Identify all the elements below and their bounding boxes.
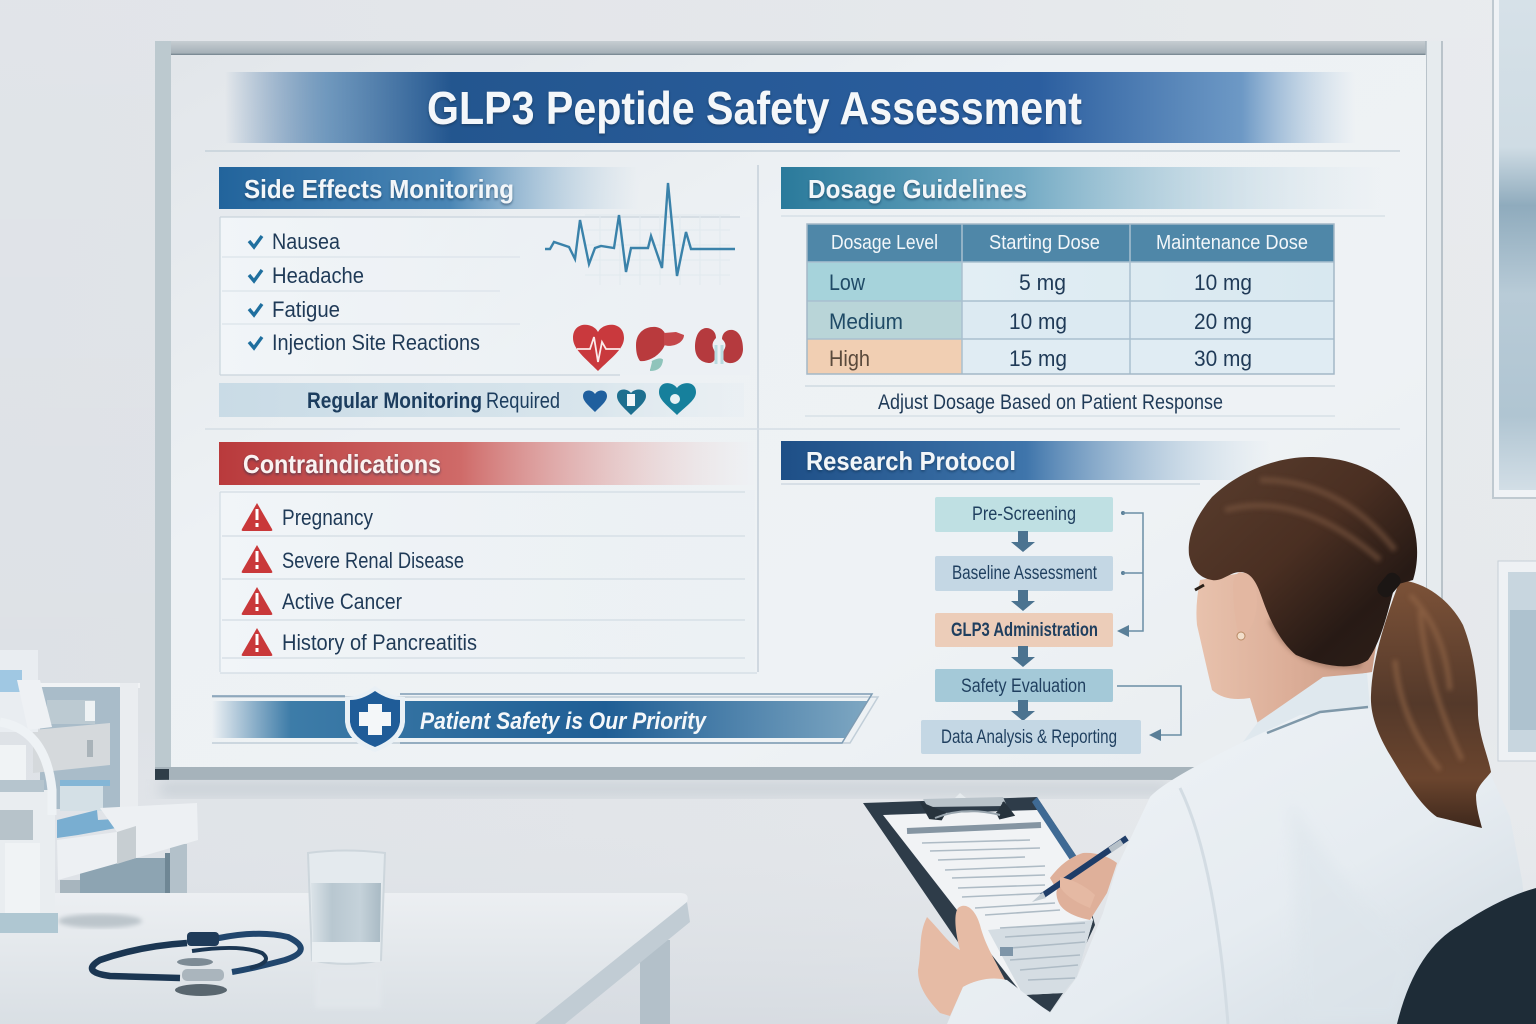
paper form — [883, 810, 1093, 995]
connector to reporting — [1117, 686, 1181, 741]
desk — [0, 893, 690, 1024]
hair tie — [1375, 570, 1403, 600]
title banner — [225, 72, 1355, 143]
arrow — [1011, 646, 1035, 667]
front lab device — [0, 722, 58, 933]
icon: liver — [636, 327, 684, 370]
research heading — [781, 441, 1271, 480]
icon: heart with pulse — [573, 325, 624, 371]
regular monitoring bar: Required — [486, 388, 560, 413]
side effects heading — [219, 167, 639, 209]
flow step: baseline assessment: Baseline Assessment — [952, 563, 1098, 584]
ribbon: patient safety: Patient Safety is Our Priority — [420, 708, 707, 735]
regular monitoring bar: Regular Monitoring — [307, 388, 482, 413]
panel: dosage guidelines — [781, 167, 1385, 416]
arrow — [1011, 700, 1035, 721]
dosage table: 5 mg — [1019, 270, 1066, 295]
neck and face — [1195, 570, 1380, 724]
side effects list: Injection Site Reactions — [272, 330, 480, 355]
side effects list: Headache — [272, 263, 364, 288]
woman in lab coat — [918, 457, 1536, 1024]
contraindications heading — [219, 442, 754, 485]
warning item: pregnancy: Pregnancy — [282, 505, 373, 530]
dosage table: Starting Dose — [989, 232, 1100, 254]
writing hand — [1050, 853, 1117, 920]
flow step: baseline assessment — [935, 556, 1113, 591]
stethoscope — [92, 932, 301, 996]
warning item: active cancer — [242, 587, 402, 615]
dosage table: 15 mg — [1009, 346, 1067, 371]
side effects list: Fatigue — [272, 297, 340, 322]
ECG waveform — [545, 183, 735, 285]
lab coat — [947, 690, 1536, 1024]
feedback connector to administration — [1117, 511, 1143, 637]
warning item: active cancer: Active Cancer — [282, 589, 402, 614]
icon: teal heart with figure — [617, 390, 646, 415]
dosage table: 30 mg — [1194, 346, 1252, 371]
arrow — [1011, 590, 1035, 611]
flow step: pre-screening — [935, 497, 1113, 532]
flow step: data analysis and reporting — [921, 720, 1141, 754]
left lab equipment — [0, 650, 198, 900]
whiteboard panel — [155, 41, 1442, 780]
fingertip — [1060, 877, 1095, 908]
flow step: data analysis and reporting: Data Analysis & Reporting — [941, 727, 1117, 748]
flow step: safety evaluation — [935, 669, 1113, 702]
warning item: pregnancy — [242, 503, 373, 531]
side effects list — [220, 217, 750, 375]
icon: teal heart with drop — [659, 383, 696, 415]
warning item: renal disease — [242, 545, 464, 573]
research heading: Research Protocol — [806, 446, 1016, 476]
warning item: renal disease: Severe Renal Disease — [282, 548, 464, 573]
contraindications list — [220, 490, 757, 673]
dosage heading — [781, 167, 1381, 209]
icon: blue heart — [583, 390, 607, 412]
dosage table: 10 mg — [1009, 309, 1067, 334]
board shadow on wall — [160, 781, 1170, 797]
dosage table: 10 mg — [1194, 270, 1252, 295]
regular monitoring bar — [219, 383, 744, 417]
icon: shield with cross — [345, 686, 405, 752]
panel: research protocol — [781, 441, 1271, 754]
dosage heading: Dosage Guidelines — [808, 174, 1027, 204]
dosage table: 20 mg — [1194, 309, 1252, 334]
dosage table: Low — [829, 270, 865, 295]
framed picture right middle — [1498, 561, 1536, 761]
dosage note: Adjust Dosage Based on Patient Response — [878, 391, 1223, 414]
warning item: pancreatitis — [242, 628, 477, 656]
ear and earring — [1233, 572, 1257, 640]
contraindications heading: Contraindications — [243, 449, 441, 479]
side effects heading: Side Effects Monitoring — [244, 174, 514, 204]
holding hand — [918, 906, 1005, 1016]
warning item: pancreatitis: History of Pancreatitis — [282, 630, 477, 655]
clipboard clip — [921, 793, 1013, 819]
glass of water — [308, 850, 385, 1008]
office chair — [1397, 888, 1536, 1024]
pen — [1032, 838, 1127, 902]
dosage table — [807, 224, 1334, 374]
side effects list: Nausea — [272, 229, 341, 254]
icon: kidneys — [695, 328, 743, 364]
panel: contraindications — [219, 442, 757, 673]
clipboard — [863, 793, 1095, 1012]
flow step: pre-screening: Pre-Screening — [972, 504, 1076, 525]
arrow — [1011, 531, 1035, 552]
title banner: GLP3 Peptide Safety Assessment — [427, 82, 1082, 134]
ponytail — [1371, 580, 1491, 828]
flow step: safety evaluation: Safety Evaluation — [961, 676, 1086, 697]
flow step: GLP3 administration: GLP3 Administration — [951, 620, 1098, 641]
flow step: GLP3 administration — [935, 613, 1113, 647]
collar — [1243, 673, 1370, 742]
dosage table: Dosage Level — [831, 232, 938, 254]
hair — [1189, 457, 1417, 666]
ribbon: patient safety — [212, 686, 878, 752]
dosage table: Medium — [829, 309, 903, 334]
dosage table: High — [829, 346, 870, 371]
framed picture right top — [1493, 0, 1536, 498]
dosage table: Maintenance Dose — [1156, 232, 1308, 254]
panel: side effects monitoring — [219, 167, 750, 417]
